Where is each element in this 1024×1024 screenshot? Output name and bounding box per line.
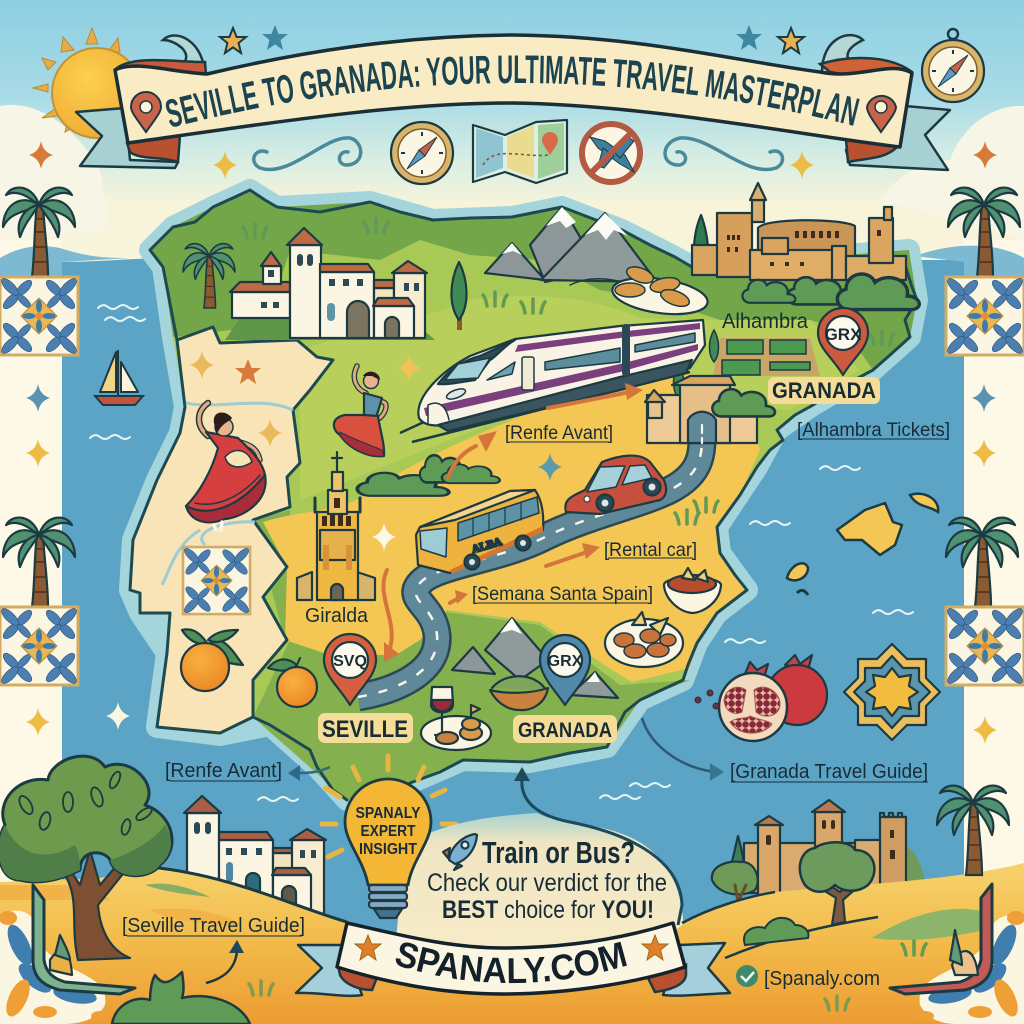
hill line xyxy=(150,867,347,922)
link: Rental car: [Rental car] xyxy=(604,540,697,561)
cypress xyxy=(451,262,467,330)
city gate xyxy=(645,376,775,443)
pin: GRX blue xyxy=(540,635,590,705)
bush right xyxy=(744,918,808,945)
arrow to Renfe Avant xyxy=(288,765,330,781)
corner tile left xyxy=(0,910,109,1024)
southern green xyxy=(253,510,690,800)
garden plots xyxy=(674,330,820,398)
sea xyxy=(62,256,964,970)
rail tracks xyxy=(400,372,690,442)
distant sea bands xyxy=(0,246,1024,277)
Alhambra palace xyxy=(692,183,906,280)
land: Spain xyxy=(130,190,917,800)
green bracket left xyxy=(33,885,135,994)
curved arrow up xyxy=(206,940,244,983)
Balearic islands xyxy=(787,494,938,595)
label: GRANADA south: GRANADA xyxy=(518,719,612,742)
rays of bulb xyxy=(322,756,456,857)
tree right xyxy=(800,842,874,925)
castle bottom right xyxy=(744,800,925,895)
lightbulb: INSIGHT xyxy=(359,841,417,858)
right hill xyxy=(640,863,1024,1024)
green shrubs under Alhambra xyxy=(742,274,919,310)
lightbulb xyxy=(345,779,431,918)
grass bottom right xyxy=(825,941,926,1010)
right ribbon tail xyxy=(820,35,950,170)
hill lines xyxy=(682,892,878,958)
Alba bus xyxy=(416,490,543,574)
road xyxy=(358,425,702,697)
Seville buildings xyxy=(184,796,326,914)
central light green xyxy=(300,296,860,500)
olives bowl xyxy=(490,676,548,710)
ribbon tails xyxy=(296,943,730,996)
orange arrows xyxy=(383,383,643,662)
pin: SVQ: SVQ xyxy=(333,653,367,670)
side tiles xyxy=(0,276,1024,686)
link: Semana Santa Spain: [Semana Santa Spain] xyxy=(472,584,653,605)
grass tufts xyxy=(243,219,894,524)
swirls xyxy=(254,138,783,170)
map stars xyxy=(190,351,562,551)
wine and tapas plate xyxy=(421,687,491,750)
pin: GRX red: GRX xyxy=(825,325,862,344)
lightbulb: SPANALY xyxy=(356,805,421,822)
link: Spanaly.com: [Spanaly.com xyxy=(764,968,880,990)
pomegranates xyxy=(695,655,827,741)
footer URL: SPANALY.COM xyxy=(396,942,627,984)
Alba bus: ALBA xyxy=(471,536,503,556)
pin: SVQ xyxy=(324,634,376,705)
rental car xyxy=(565,456,666,514)
high-speed train xyxy=(418,320,705,431)
callout text: BEST choice for YOU! xyxy=(442,896,654,924)
grass xyxy=(249,981,273,995)
banner body xyxy=(115,35,912,147)
label: Giralda: Giralda xyxy=(305,605,369,627)
decorative stars xyxy=(26,25,997,744)
footer banner xyxy=(294,921,732,998)
footer stars xyxy=(355,935,668,960)
pin: GRX red xyxy=(818,308,868,375)
red bracket right xyxy=(890,884,992,994)
left ribbon tail xyxy=(76,36,206,168)
yellow interior xyxy=(263,368,760,682)
speech bubble xyxy=(395,813,684,950)
hill left xyxy=(0,867,360,1024)
sand base xyxy=(0,965,1024,1024)
Giralda tower xyxy=(297,452,375,600)
bottom left bush xyxy=(112,972,250,1024)
palms xyxy=(3,188,1020,607)
palm lower right xyxy=(937,786,1009,875)
Portugal xyxy=(130,327,333,733)
clouds xyxy=(0,105,1024,240)
banner body xyxy=(337,923,685,994)
coast halo xyxy=(130,190,917,800)
shrubs xyxy=(357,455,500,496)
arrow to Granada guide xyxy=(642,718,724,781)
icon: top compass xyxy=(391,122,453,184)
pin: GRX blue: GRX xyxy=(548,653,583,670)
icon: pocket compass xyxy=(922,29,984,102)
cypress and small tree xyxy=(712,836,758,902)
large orange xyxy=(181,629,243,691)
meadow patch xyxy=(872,909,985,940)
icon: rocket xyxy=(443,834,477,870)
icon: title pin right xyxy=(867,96,896,132)
icon: title pin left xyxy=(131,92,161,132)
islamic star xyxy=(844,644,940,740)
pastry plate xyxy=(570,264,710,320)
bubble outline and arrow xyxy=(514,767,682,925)
south mountains xyxy=(452,618,618,698)
panel: Iberia map xyxy=(130,190,917,800)
label: Alhambra: Alhambra xyxy=(722,310,808,333)
corner tile right xyxy=(916,911,1024,1024)
label: GRANADA north: GRANADA xyxy=(772,378,876,403)
side strips xyxy=(0,240,1024,880)
title banner xyxy=(74,33,952,172)
northern green xyxy=(150,190,917,370)
link: Seville Travel Guide: [Seville Travel Guide] xyxy=(122,915,305,937)
olive tree left xyxy=(0,756,172,960)
title: SEVILLE TO GRANADA: YOUR ULTIMATE TRAVEL MASTERPLAN xyxy=(166,56,860,127)
link: Alhambra Tickets: [Alhambra Tickets] xyxy=(797,420,950,441)
icon: no flights xyxy=(582,124,640,182)
white village xyxy=(183,228,435,340)
lightbulb: EXPERT xyxy=(360,823,416,840)
flamenco dancer large xyxy=(186,403,266,530)
Portugal mosaic tile xyxy=(182,546,251,615)
background sky xyxy=(0,0,1024,270)
top mountains xyxy=(485,207,657,282)
small orange xyxy=(268,658,317,707)
link: Renfe Avant lower: [Renfe Avant] xyxy=(165,760,282,782)
sailboat xyxy=(95,350,143,405)
callout text xyxy=(427,835,667,924)
land outline xyxy=(150,190,917,800)
link: Renfe Avant upper: [Renfe Avant] xyxy=(505,423,613,444)
salsa bowl xyxy=(664,568,721,613)
flamenco dancer small xyxy=(334,366,386,456)
sea waves xyxy=(90,305,913,801)
Portugal rivers xyxy=(162,403,293,585)
callout text: Check our verdict for the xyxy=(427,869,667,897)
hill patches xyxy=(0,884,240,925)
icon: folded map xyxy=(473,120,567,183)
label: SEVILLE: SEVILLE xyxy=(322,716,408,743)
verified badge xyxy=(736,965,758,987)
link: Granada Travel Guide: [Granada Travel Guide] xyxy=(730,761,928,783)
callout text: Train or Bus? xyxy=(482,835,635,870)
upper tapas plate xyxy=(605,612,683,667)
sun xyxy=(33,28,142,138)
